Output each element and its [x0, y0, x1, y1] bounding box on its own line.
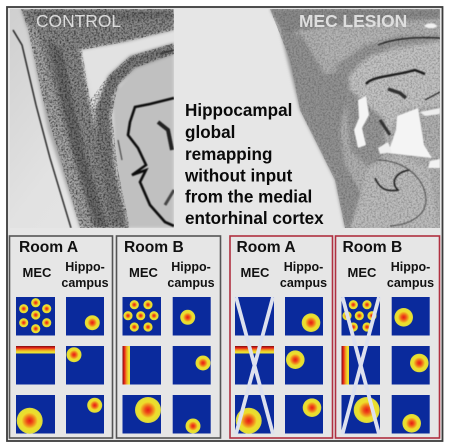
control micrograph — [10, 9, 174, 228]
label: MEC lesion: MEC LESION — [299, 11, 407, 31]
panel: lesion room B: campus — [387, 276, 434, 290]
panel: control room A: Room A — [19, 239, 78, 256]
hippocampus place field — [66, 297, 104, 336]
main title text: without input — [184, 166, 293, 186]
panel: lesion room A: Hippo- — [284, 260, 323, 274]
main title text: entorhinal cortex — [185, 209, 324, 228]
MEC border cell map — [122, 346, 161, 384]
main title text: remapping — [185, 145, 272, 164]
label: control: CONTROL — [36, 11, 121, 31]
panel: lesion room A: Room A — [236, 239, 296, 256]
panel: control room A: campus — [61, 276, 109, 290]
hippocampus place field — [173, 297, 211, 336]
panel: lesion room A: campus — [280, 276, 327, 290]
hippocampus place field — [285, 346, 323, 384]
MEC spatial field — [342, 395, 380, 434]
panel: control room A: Hippo- — [65, 260, 105, 274]
MEC border cell map — [235, 346, 274, 384]
panel: lesion room A — [230, 236, 332, 438]
MEC map, silenced — [235, 297, 274, 336]
panel: lesion room B: Hippo- — [391, 260, 430, 274]
MEC grid cell map — [122, 297, 161, 336]
panel: control room B: campus — [167, 276, 215, 290]
MEC spatial field — [122, 395, 161, 434]
lesion micrograph — [268, 9, 440, 228]
panel: lesion room B — [336, 236, 440, 438]
MEC grid cell map — [16, 297, 55, 336]
hippocampus place field — [285, 297, 323, 336]
MEC spatial field — [235, 395, 274, 434]
main title text: from the medial — [185, 188, 312, 206]
hippocampus place field — [285, 395, 323, 434]
white X over MEC column — [236, 297, 273, 434]
panel: control room A: MEC — [23, 265, 52, 280]
main title text: Hippocampal — [185, 101, 292, 120]
hippocampus place field — [173, 395, 211, 434]
MEC border cell map — [342, 346, 380, 384]
MEC spatial field — [16, 395, 55, 434]
panel: lesion room B: MEC — [348, 265, 377, 280]
MEC grid cell map — [342, 297, 380, 336]
panel: control room B — [116, 236, 220, 438]
panel: control room B: Room B — [124, 239, 184, 256]
hippocampus place field — [173, 346, 211, 384]
hippocampus place field — [392, 297, 430, 336]
MEC border cell map — [16, 346, 55, 384]
main title text: global — [185, 123, 235, 142]
panel: control room A — [10, 236, 112, 438]
panel: lesion room B: Room B — [342, 239, 402, 256]
panel: lesion room A: MEC — [241, 265, 270, 280]
hippocampus place field — [66, 346, 104, 384]
hippocampus place field — [66, 395, 104, 434]
white X over MEC column — [342, 297, 379, 434]
main title text — [184, 101, 324, 228]
hippocampus place field — [392, 395, 430, 434]
panel: control room B: Hippo- — [171, 260, 211, 274]
panel: control room B: MEC — [129, 265, 159, 280]
hippocampus place field — [392, 346, 430, 384]
